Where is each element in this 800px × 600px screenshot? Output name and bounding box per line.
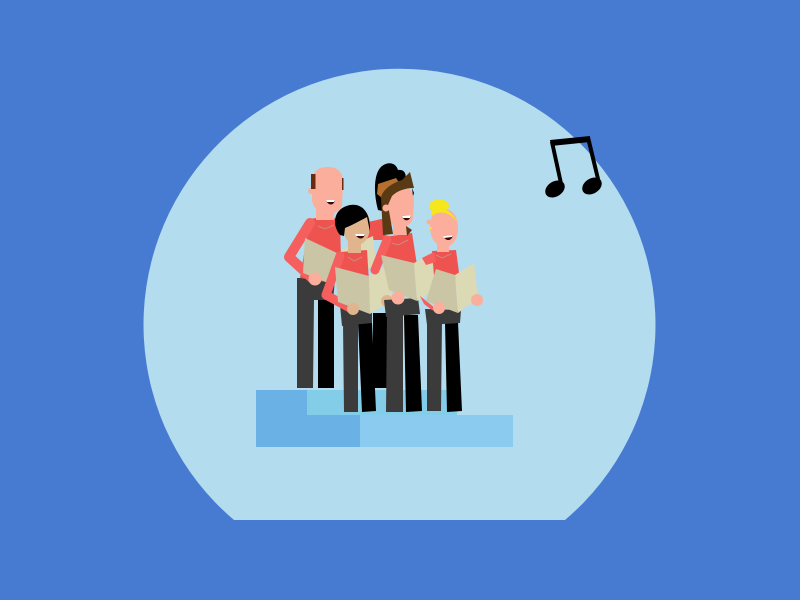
singer: woman with brown hair	[375, 172, 442, 412]
stepped podium	[256, 390, 513, 447]
spotlight circle	[143, 69, 655, 520]
singer: woman with short black hair	[326, 205, 393, 412]
singer: woman behind with bun	[366, 163, 406, 388]
singer: bald man	[289, 167, 376, 388]
music notes icon	[542, 136, 605, 201]
singer: blonde woman	[420, 200, 483, 412]
